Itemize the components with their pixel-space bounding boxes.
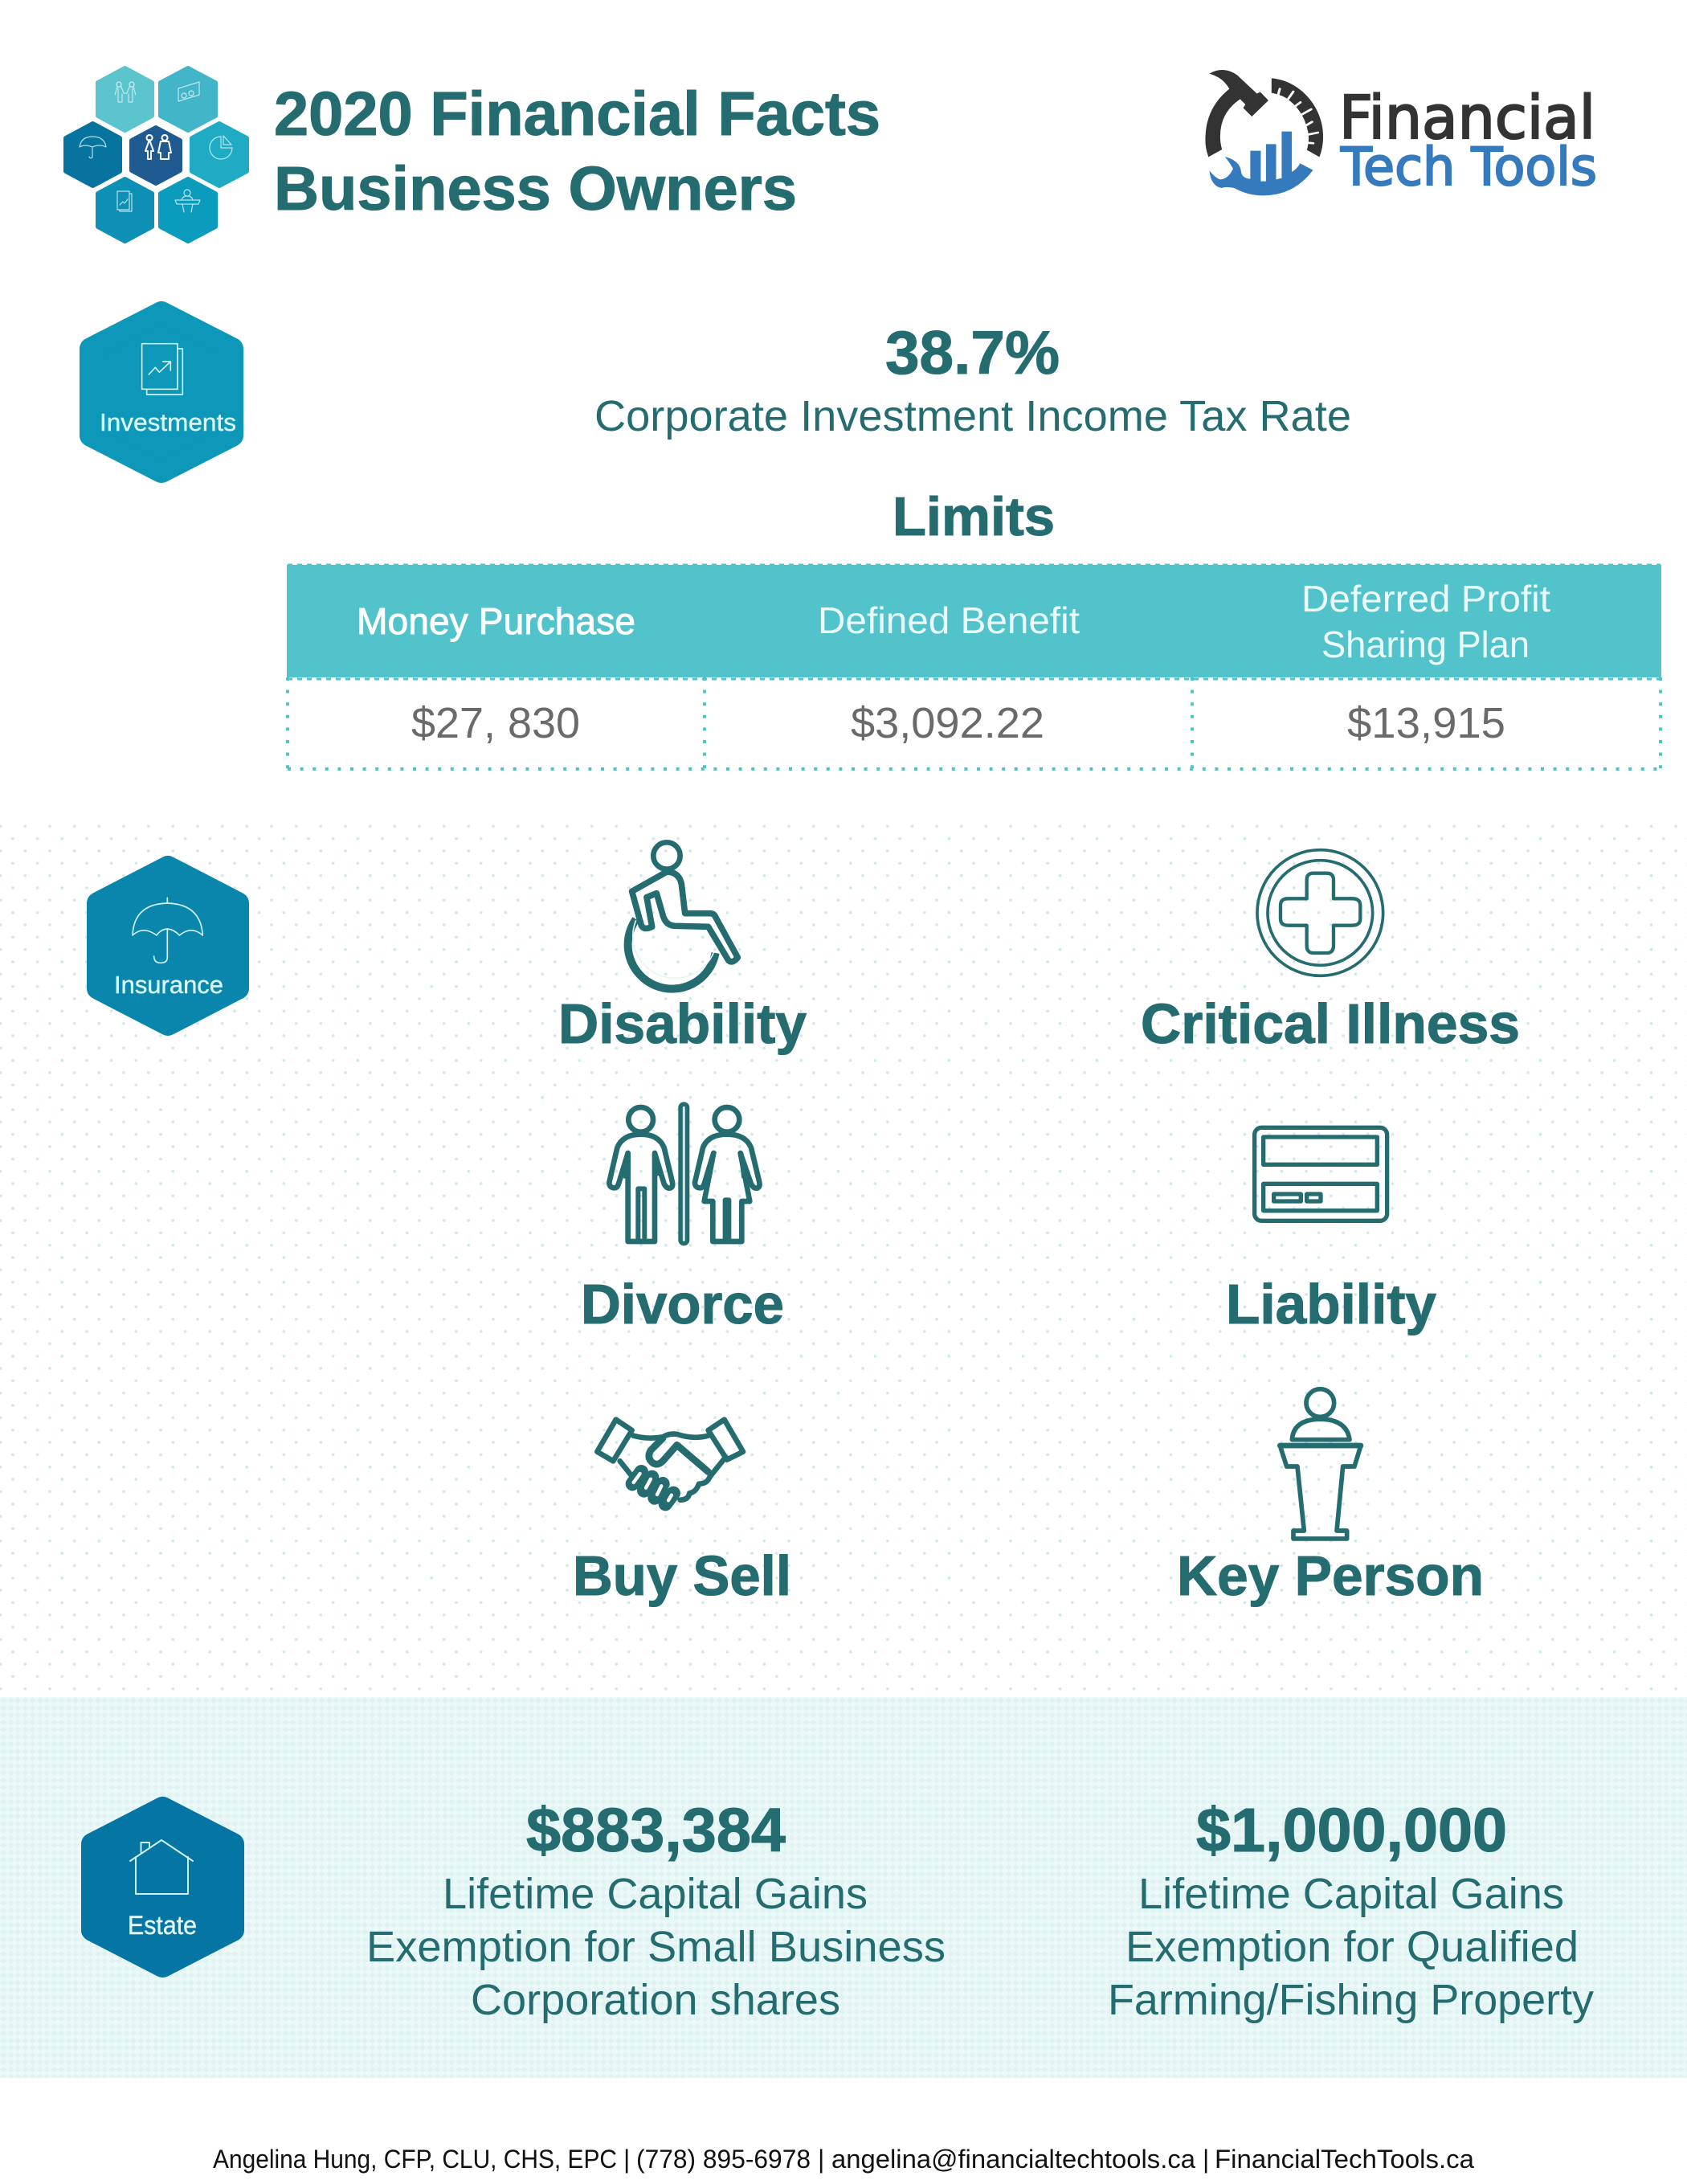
table header: Deferred Profit [1301, 578, 1550, 620]
item: divorce [581, 1107, 784, 1335]
table header [357, 578, 1550, 665]
footer contact line: angelina@financialtechtools.ca [831, 2145, 1195, 2174]
icon: medical cross [1257, 850, 1383, 975]
icon: man and woman divided [609, 1107, 760, 1241]
icon: honeycomb logo [66, 68, 247, 241]
item: critical illness [1141, 850, 1520, 1055]
item: liability: Liability [1226, 1273, 1436, 1335]
item: critical illness: Critical Illness [1141, 992, 1520, 1055]
stat: farming fishing exemption: Lifetime Capital Gains [1138, 1870, 1564, 1918]
item: divorce: Divorce [581, 1273, 784, 1335]
icon: house [130, 1840, 193, 1894]
item: liability [1226, 1127, 1436, 1335]
panel: investments badge [91, 313, 236, 472]
panel: investments badge: Investments [100, 408, 236, 436]
table values: $27, 830 [411, 699, 580, 747]
stat: farming fishing exemption [1108, 1796, 1594, 2024]
item: disability [558, 842, 807, 1055]
table values: $3,092.22 [851, 699, 1044, 747]
table values: $13,915 [1347, 699, 1505, 747]
icon: umbrella [133, 898, 202, 963]
item: key person [1177, 1389, 1484, 1607]
item: buy sell: Buy Sell [573, 1544, 791, 1607]
footer contact line: Angelina Hung, CFP, CLU, CHS, EPC [213, 2145, 617, 2174]
table: limits [287, 565, 1661, 769]
icon: handshake [597, 1420, 743, 1504]
stat: corporate tax rate [594, 319, 1351, 440]
icon: podium speaker [1280, 1389, 1361, 1539]
table header: Money Purchase [357, 600, 635, 642]
stat: small business exemption: Exemption for Small Business [366, 1923, 946, 1971]
stat: small business exemption: $883,384 [526, 1796, 786, 1865]
table values [411, 699, 1505, 747]
footer contact line: FinancialTechTools.ca [1215, 2145, 1474, 2174]
stat: corporate tax rate: 38.7% [885, 319, 1060, 387]
panel: estate badge [92, 1808, 233, 1966]
item: disability: Disability [558, 992, 807, 1055]
icon: wheelchair [628, 842, 737, 989]
logo: Financial Tech Tools [1205, 70, 1597, 198]
stat: small business exemption: Corporation shares [471, 1976, 840, 2024]
footer contact line: | [623, 2145, 630, 2174]
title: Business Owners [274, 154, 797, 223]
table header: Defined Benefit [818, 599, 1080, 641]
panel: estate background [0, 1697, 1687, 2078]
stat: corporate tax rate: Corporate Investment Income Tax Rate [594, 392, 1351, 440]
panel: estate badge: Estate [128, 1911, 197, 1940]
footer contact line: | [1203, 2145, 1209, 2174]
item: key person: Key Person [1177, 1544, 1484, 1607]
stat: small business exemption [366, 1796, 946, 2024]
panel: insurance badge [98, 867, 238, 1025]
stat: farming fishing exemption: Farming/Fishing Property [1108, 1976, 1594, 2024]
heading: limits: Limits [893, 486, 1055, 547]
item: buy sell [573, 1420, 791, 1607]
table header: Sharing Plan [1321, 624, 1530, 665]
title: 2020 Financial Facts [274, 80, 880, 149]
logo: Financial Tech Tools: Financial [1339, 84, 1595, 153]
icon: document chart [142, 344, 182, 395]
footer contact line: | [818, 2145, 824, 2174]
panel: insurance badge: Insurance [114, 971, 223, 999]
title [274, 80, 880, 223]
logo: Financial Tech Tools: Tech Tools [1340, 137, 1597, 198]
stat: small business exemption: Lifetime Capital Gains [443, 1870, 868, 1918]
panel: insurance background [0, 822, 1687, 1697]
footer contact line: (778) 895-6978 [636, 2145, 811, 2174]
icon: hammer and gauge mark [1205, 70, 1323, 195]
stat: farming fishing exemption: Exemption for Qualified [1125, 1923, 1579, 1971]
icon: card [1255, 1127, 1387, 1221]
stat: farming fishing exemption: $1,000,000 [1196, 1796, 1507, 1865]
footer contact line [213, 2145, 1474, 2174]
